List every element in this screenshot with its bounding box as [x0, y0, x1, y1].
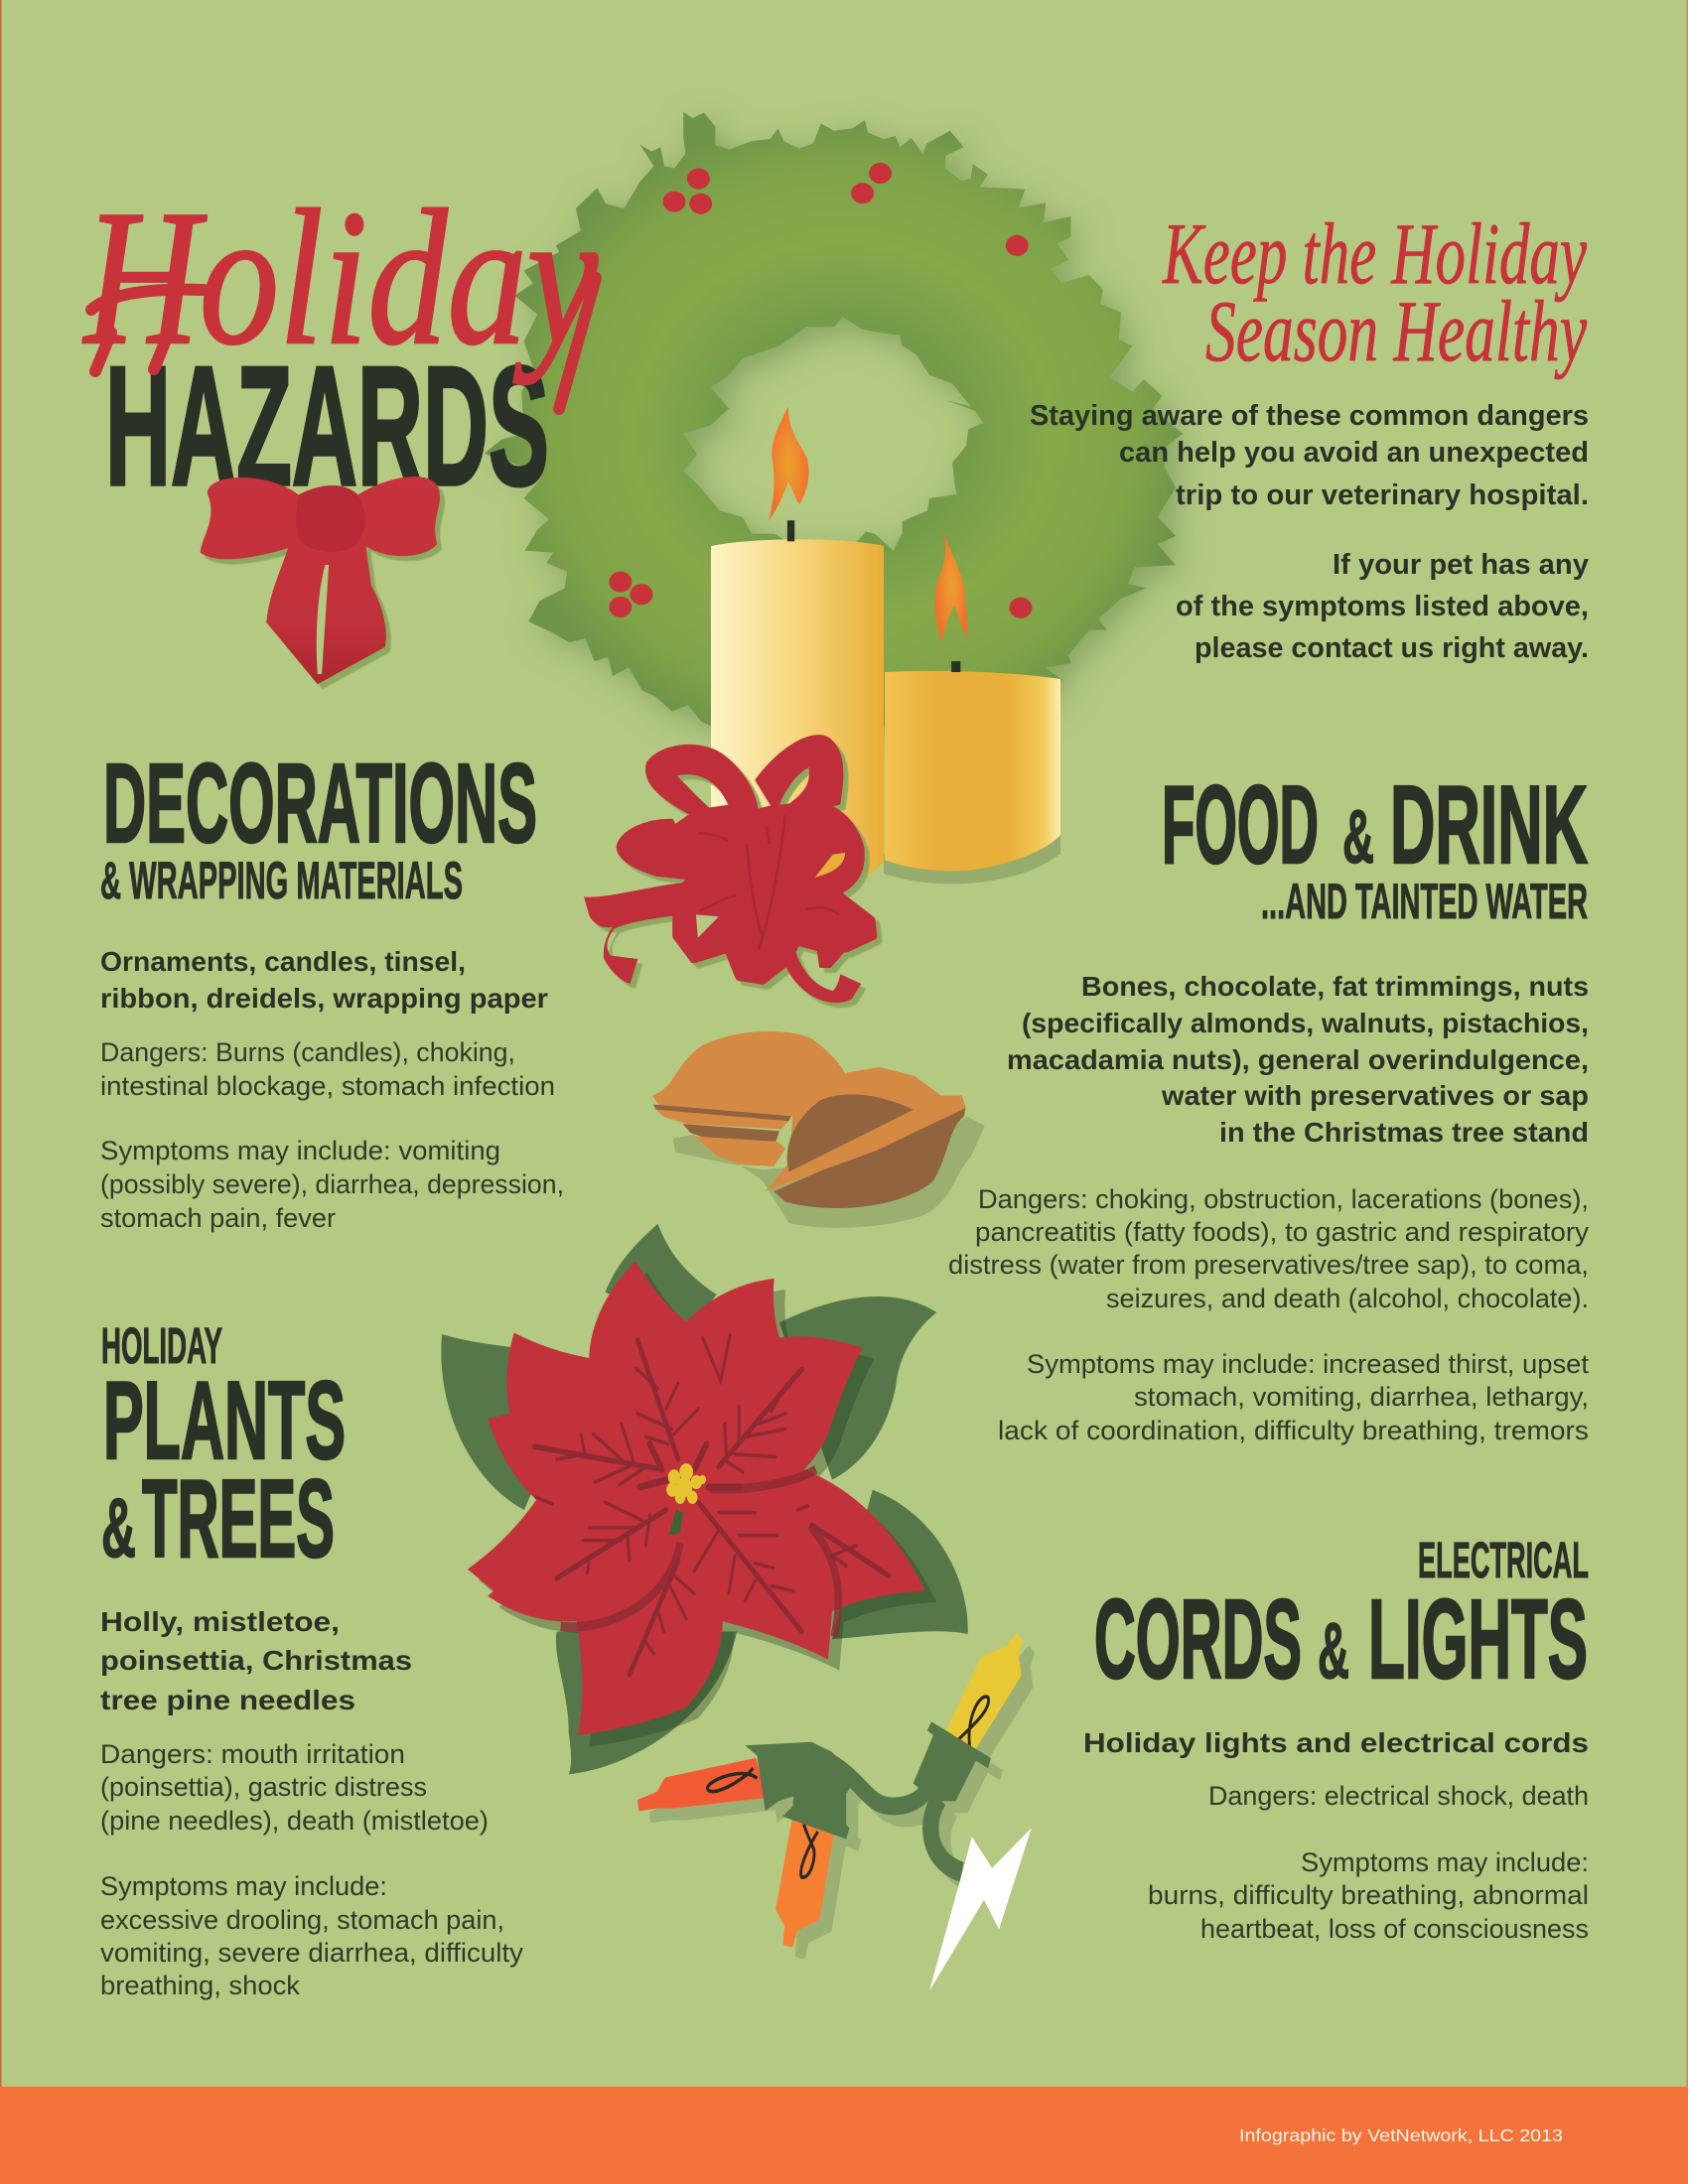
icon: candles — [711, 406, 1060, 898]
footer credit: Infographic by VetNetwork, LLC 2013 — [1239, 2125, 1563, 2145]
title script line: Holiday — [82, 171, 598, 385]
plants hazards list: poinsettia, Christmas — [100, 1645, 412, 1676]
yellow stamens — [666, 1463, 706, 1504]
icon: poinsettia — [441, 1224, 968, 1774]
petal folds — [561, 1469, 838, 1637]
filaments — [707, 1697, 989, 1877]
decorations hazards list: Ornaments, candles, tinsel, — [100, 946, 466, 977]
plants dangers: (poinsettia), gastric distress — [100, 1772, 427, 1802]
plants hazards list — [100, 1606, 412, 1715]
decorations hazards list — [100, 946, 548, 1014]
intro text: If your pet has any — [1333, 549, 1589, 581]
icon: christmas lights and cord — [639, 1637, 1032, 1991]
food symptoms: stomach, vomiting, diarrhea, lethargy, — [1134, 1382, 1589, 1412]
petals — [468, 1261, 925, 1735]
food dangers: Dangers: choking, obstruction, lacerations (bones), — [978, 1184, 1589, 1214]
decorations dangers: intestinal blockage, stomach infection — [100, 1071, 555, 1101]
food dangers: distress (water from preservatives/tree sap), to coma, — [948, 1250, 1589, 1280]
cords symptoms: Symptoms may include: — [1301, 1847, 1589, 1877]
intro text: can help you avoid an unexpected — [1119, 437, 1589, 469]
plants dangers: Dangers: mouth irritation — [100, 1739, 405, 1769]
plants symptoms: excessive drooling, stomach pain, — [100, 1905, 504, 1935]
cords heading: & — [1318, 1606, 1349, 1695]
food hazards list: Bones, chocolate, fat trimmings, nuts — [1081, 971, 1589, 1002]
panel: decorations — [100, 741, 564, 1233]
decorations heading: DECORATIONS — [103, 741, 537, 866]
tall candle — [711, 539, 884, 898]
large flame — [769, 406, 808, 541]
short candle — [885, 671, 1060, 871]
intro text: trip to our veterinary hospital. — [1176, 479, 1589, 511]
petal shadow — [479, 1272, 936, 1746]
icon: walnuts — [652, 1031, 985, 1228]
decorations heading: & WRAPPING MATERIALS — [100, 852, 463, 910]
orange-red bulb — [639, 1760, 764, 1809]
food hazards list: (specifically almonds, walnuts, pistachios, — [1022, 1008, 1589, 1038]
cords — [832, 1763, 962, 1872]
food symptoms: lack of coordination, difficulty breathing, tremors — [998, 1416, 1589, 1445]
intro text: of the symptoms listed above, — [1176, 591, 1589, 622]
decorations symptoms — [100, 1136, 564, 1233]
plants heading: PLANTS — [103, 1359, 346, 1482]
candle shadow — [884, 836, 1060, 884]
decorations symptoms: stomach pain, fever — [100, 1203, 336, 1233]
food hazards list: water with preservatives or sap — [1161, 1080, 1589, 1111]
cords symptoms — [1148, 1847, 1589, 1944]
title — [82, 171, 598, 521]
cords symptoms: heartbeat, loss of consciousness — [1200, 1914, 1589, 1944]
intro text — [1030, 400, 1589, 664]
cords hazards list: Holiday lights and electrical cords — [1083, 1727, 1589, 1758]
veins — [534, 1335, 889, 1675]
food symptoms: Symptoms may include: increased thirst, upset — [1027, 1349, 1590, 1379]
right page edge — [1686, 0, 1688, 2087]
panel: plants and trees — [100, 1317, 524, 2000]
orange bulb — [777, 1822, 832, 1945]
plants heading: HOLIDAY — [101, 1317, 222, 1374]
decorations symptoms: Symptoms may include: vomiting — [100, 1136, 500, 1165]
small flame — [935, 527, 968, 672]
plants symptoms: vomiting, severe diarrhea, difficulty — [100, 1938, 524, 1968]
plants symptoms — [100, 1871, 524, 2000]
title block line: HAZARDS — [105, 332, 549, 521]
cords dangers: Dangers: electrical shock, death — [1208, 1781, 1589, 1811]
plants dangers — [100, 1739, 489, 1836]
decorations dangers — [100, 1037, 555, 1101]
panel: food and drink — [948, 763, 1590, 1445]
decorations dangers: Dangers: Burns (candles), choking, — [100, 1037, 515, 1067]
food heading: FOOD — [1162, 763, 1319, 887]
plants symptoms: Symptoms may include: — [100, 1871, 387, 1901]
food hazards list: in the Christmas tree stand — [1219, 1117, 1589, 1148]
plants dangers: (pine needles), death (mistletoe) — [100, 1806, 489, 1836]
food dangers: seizures, and death (alcohol, chocolate). — [1106, 1284, 1589, 1313]
wreath berries — [609, 163, 1032, 618]
sockets — [745, 1721, 991, 1840]
panel: cords and lights — [1083, 1532, 1589, 1944]
wreath — [485, 112, 1183, 726]
cords heading: CORDS — [1094, 1576, 1302, 1702]
food symptoms — [998, 1349, 1590, 1445]
intro block — [1030, 206, 1589, 664]
decorations heading — [100, 741, 537, 910]
food heading: & — [1342, 795, 1374, 880]
centre gap — [669, 1510, 683, 1536]
plants heading: TREES — [142, 1457, 335, 1580]
plants symptoms: breathing, shock — [100, 1971, 301, 2000]
food heading — [1162, 763, 1588, 929]
plants heading — [101, 1317, 346, 1580]
title script flourishes — [91, 278, 596, 409]
cords symptoms: burns, difficulty breathing, abnormal — [1148, 1880, 1589, 1910]
yellow bulb — [947, 1637, 1021, 1748]
icon: red bow — [201, 477, 440, 684]
decorations hazards list: ribbon, dreidels, wrapping paper — [100, 983, 548, 1014]
leaves — [441, 1224, 968, 1774]
ribbon gaps and shading — [815, 853, 845, 878]
intro script heading — [1162, 206, 1588, 380]
left page edge — [0, 0, 2, 2087]
food hazards list: macadamia nuts), general overindulgence, — [1007, 1044, 1589, 1075]
food dangers — [948, 1184, 1590, 1313]
icon: lightning bolt — [929, 1828, 1032, 1991]
intro text: Staying aware of these common dangers — [1030, 400, 1589, 432]
plants heading: & — [101, 1481, 136, 1574]
plants hazards list: tree pine needles — [100, 1685, 355, 1715]
decorations symptoms: (possibly severe), diarrhea, depression, — [100, 1169, 564, 1199]
food dangers: pancreatitis (fatty foods), to gastric and respiratory — [975, 1217, 1590, 1247]
cords heading — [1094, 1532, 1589, 1702]
plants hazards list: Holly, mistletoe, — [100, 1606, 340, 1637]
icon: curly ribbon bow — [584, 735, 873, 1003]
food hazards list — [1007, 971, 1589, 1148]
intro text: please contact us right away. — [1195, 632, 1589, 664]
footer bar — [0, 2087, 1688, 2184]
